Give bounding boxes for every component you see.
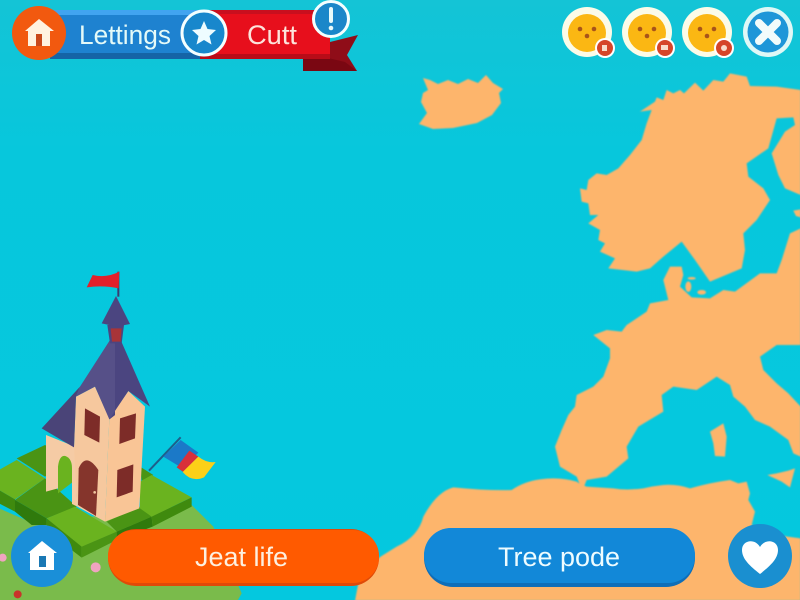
front wall (74, 387, 109, 522)
top right avatars and close (562, 7, 793, 58)
button: Jeat life (108, 529, 379, 586)
map: Scandinavia (580, 73, 800, 282)
avatar 1 (562, 7, 615, 58)
map: mainland Europe (555, 228, 800, 488)
door (78, 460, 98, 516)
icon: orange home button (12, 6, 66, 60)
map: Iceland (419, 75, 503, 129)
side flag (149, 437, 216, 479)
tab: Cutt: Cutt (247, 20, 297, 50)
map: Sicily (767, 468, 795, 487)
house (42, 272, 150, 522)
green hill (0, 505, 242, 600)
map: Baltic island (793, 209, 800, 217)
tab: Cutt (200, 10, 330, 59)
top bar: Lettings and Cutt tabs (12, 2, 358, 71)
checker tiles (0, 445, 192, 558)
flowers (0, 554, 101, 598)
button: Tree pode (424, 528, 695, 587)
map of Europe (355, 73, 800, 600)
tab: Lettings: Lettings (79, 20, 171, 50)
avatar 3 (682, 7, 734, 58)
icon: star badge (182, 11, 226, 55)
map: North Africa (355, 478, 800, 600)
button: Tree pode: Tree pode (498, 542, 620, 572)
main roof (76, 340, 115, 419)
flagpole and red flag (117, 272, 119, 297)
heart button (728, 524, 792, 588)
icon: close button (743, 7, 793, 57)
avatar 2 (622, 7, 675, 58)
tab: Lettings (50, 10, 200, 59)
map: Corsica and Sardinia (710, 423, 727, 457)
island scene with house (0, 272, 242, 600)
ribbon tail (303, 35, 358, 71)
map: Danish islands (685, 277, 706, 295)
button: Jeat life: Jeat life (195, 542, 288, 572)
spire (107, 325, 124, 343)
windows (84, 408, 136, 497)
bottom home button (11, 525, 73, 587)
icon: info badge (314, 2, 348, 36)
side wing with arch (46, 435, 77, 507)
